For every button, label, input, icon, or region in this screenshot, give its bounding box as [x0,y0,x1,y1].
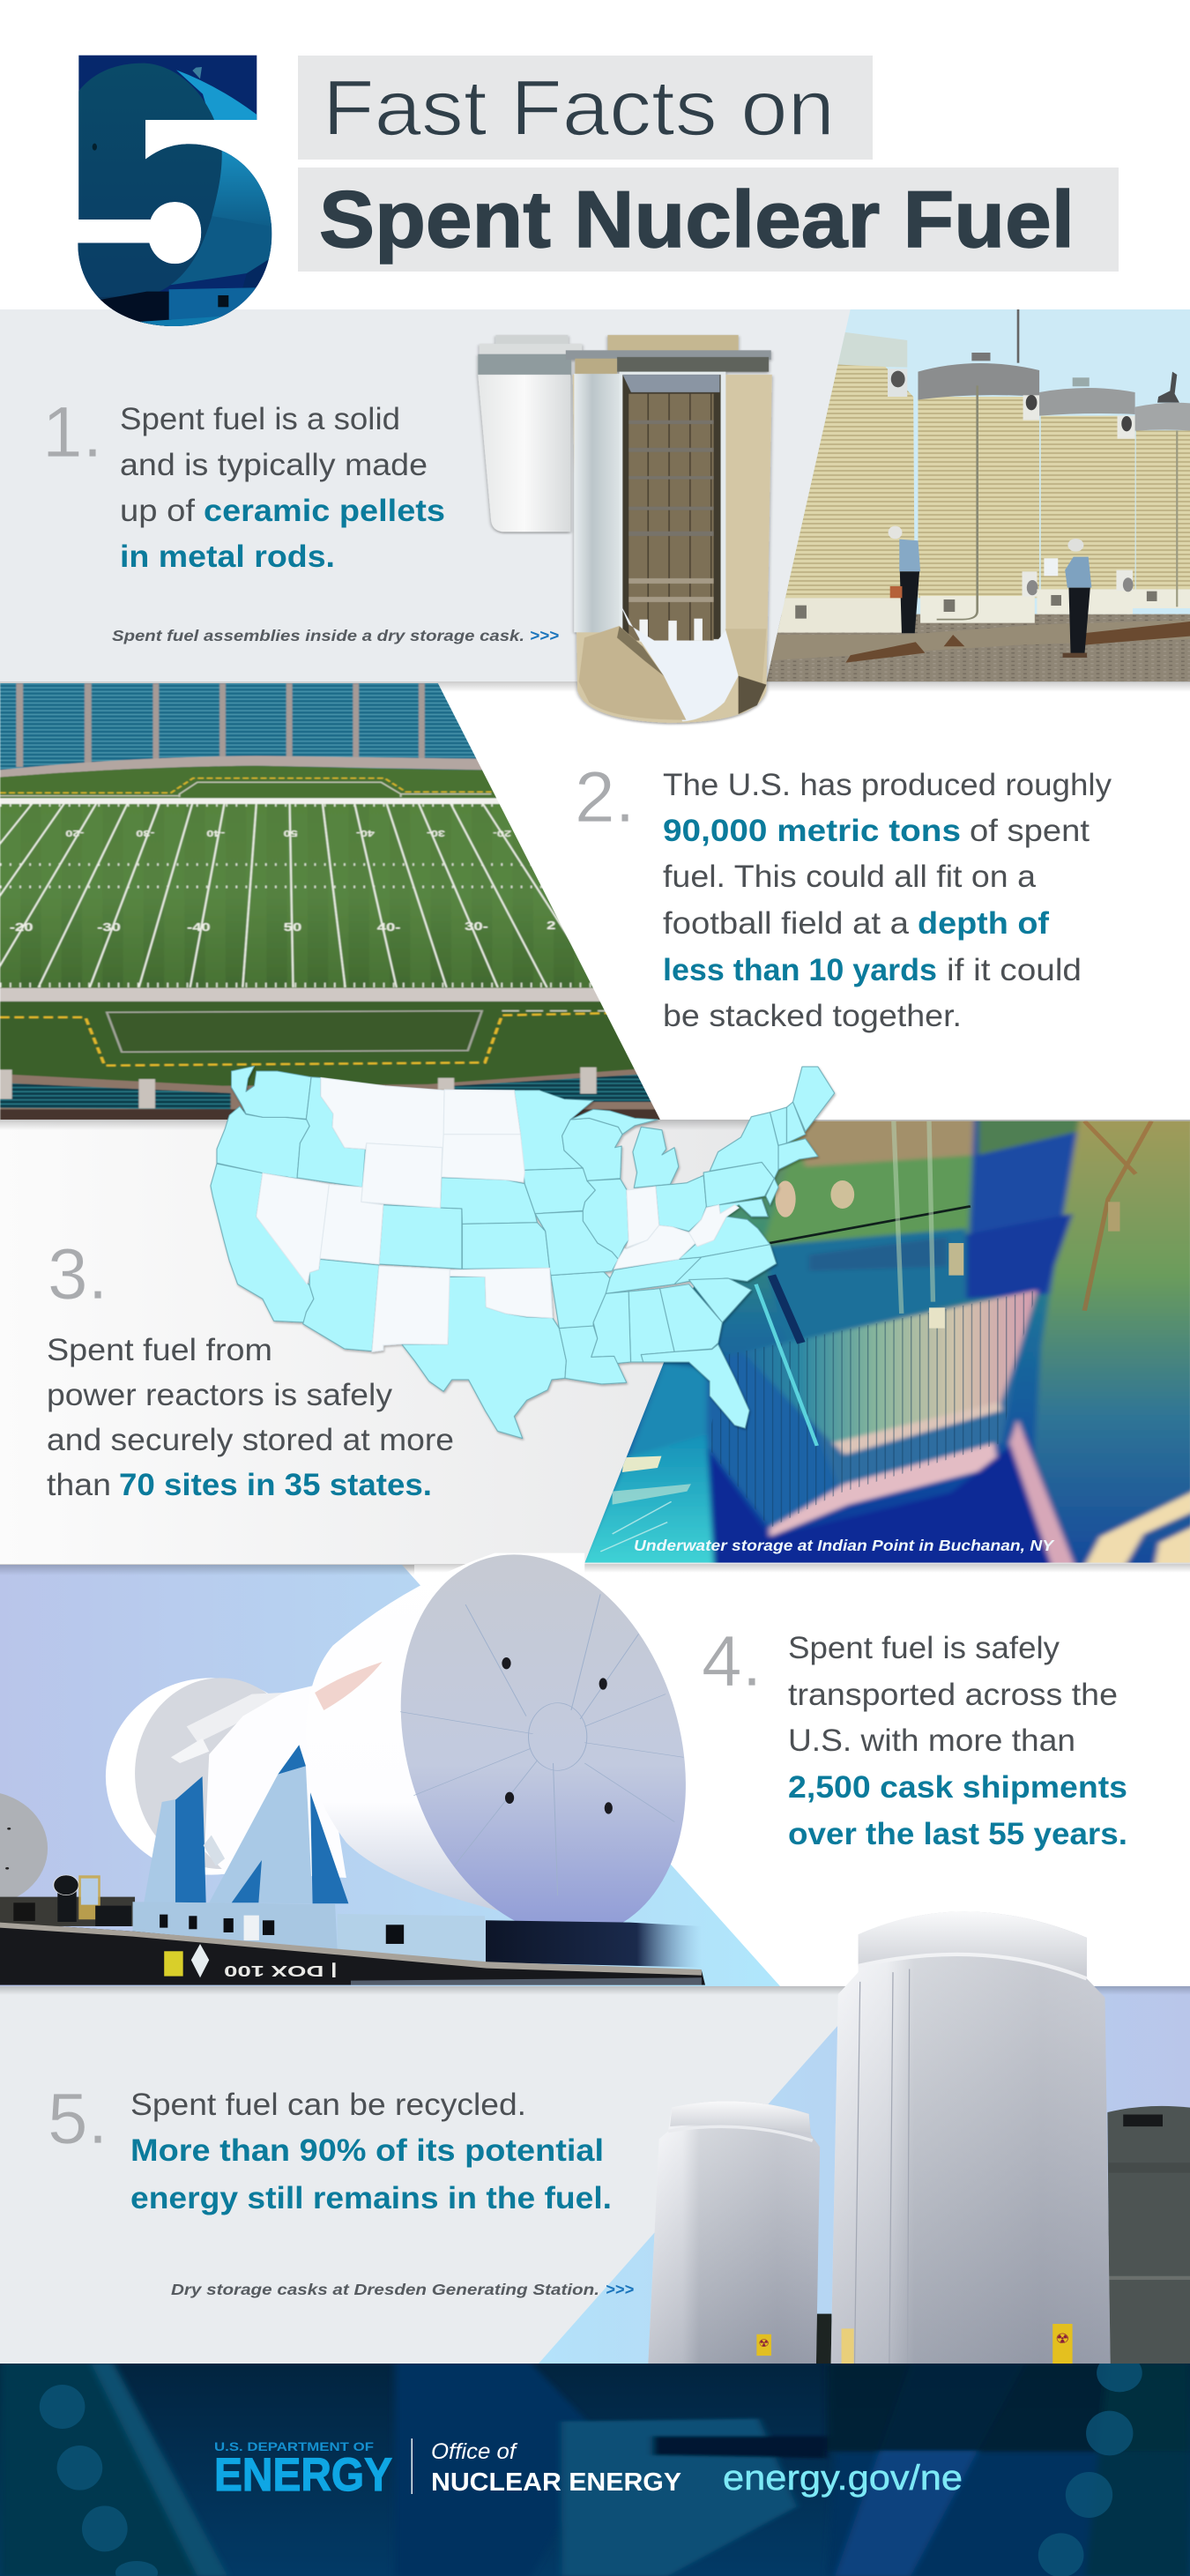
rail car deck: | DOX 100 [224,1962,338,1980]
office name [431,2439,681,2497]
fact 5 text: Spent fuel can be recycled. [130,2088,526,2122]
DOE logo: U.S. DEPARTMENT OF [214,2439,375,2453]
fact 5 text [130,2088,612,2215]
person inspecting left silo [889,526,920,633]
main cask body [573,375,772,723]
shadow under panel 3 on wedge [0,1565,414,1575]
yard numbers [10,829,556,934]
fact 3 text: than [47,1468,111,1502]
panel 5 background [0,1986,1190,2364]
panel 5: recycling [0,1911,1190,2364]
fact 1 text [120,402,445,574]
fact 3 number: 3. [48,1234,108,1314]
footer background image [0,2364,1190,2576]
distant trees [816,2314,831,2364]
yard numbers: 30- [427,829,445,838]
fact 5 text: energy still remains in the fuel. [130,2181,612,2215]
heading: big numeral five [73,51,279,331]
footer [0,2354,1190,2576]
large cask end face [375,1554,712,1937]
fact 2 text: 90,000 metric tons [663,814,961,848]
fact 4 text: U.S. with more than [788,1724,1075,1758]
fact 2 text: depth of [918,906,1049,941]
fact 1 number: 1. [42,392,102,473]
photo: underwater fuel pool [573,1111,1190,1581]
fact 3 text [47,1333,454,1502]
fact 2 text: fuel. This could all fit on a [663,860,1037,894]
fact 3 text: Spent fuel from [47,1333,272,1367]
rear closed cask [478,335,582,532]
fact 2 text: football field at a [663,906,910,941]
caption: Dresden: Dry storage casks at Dresden Generating Station. [171,2281,599,2298]
yard numbers: 40- [356,829,375,838]
caption: cask: Spent fuel assemblies inside a dry storage cask. [112,627,524,644]
yard numbers: -40 [187,922,211,934]
flatbed platform [133,1902,487,1962]
yard numbers: 40- [377,922,400,934]
fact 2 text [663,768,1112,1033]
heading: title [298,56,1119,272]
caption: Dresden: >>> [606,2281,634,2298]
fact 4 text: transported across the [788,1678,1118,1712]
shadow under panel 4 [0,1986,1190,1995]
caption: pool: Underwater storage at Indian Point in Buchanan, NY [634,1537,1054,1554]
fact 4 text [788,1631,1127,1851]
trackside equipment [0,1875,135,1926]
fact 2 text: The U.S. has produced roughly [663,768,1112,802]
large cask body [306,1553,584,1937]
blue support stands [144,1745,348,1903]
shadow under cask [486,1920,702,1968]
large cask: ☢ [1055,2331,1070,2346]
fact 2 text: less than 10 yards [663,953,937,987]
fact 1 text: in metal rods. [120,540,335,574]
illustration: dry storage cask cutaway [478,335,772,723]
panel 3 background [0,1120,1190,1564]
yard numbers: 50 [283,829,298,838]
small cask [648,2101,820,2364]
fact 2 text: of spent [970,814,1090,848]
shadow under panel 2 [0,1120,1190,1130]
connecting cylinder [205,1686,346,1878]
office name: NUCLEAR ENERGY [431,2468,681,2497]
panel 2: football field [0,679,1112,1122]
caption: cask: >>> [530,627,559,644]
fact 1 text: ceramic pellets [204,494,445,528]
small cask: ☢ [758,2337,770,2349]
fact 2 text: be stacked together. [663,999,962,1033]
panel 1 background [0,309,1190,681]
yard numbers: 2 [547,920,556,932]
fact 5 text: More than 90% of its potential [130,2133,604,2168]
fact 1 text: and is typically made [120,448,428,482]
photo: dry storage casks at Dresden [648,1911,1190,2364]
fact 4 text: Spent fuel is safely [788,1631,1060,1665]
fact 2 text: if it could [947,953,1082,987]
person holding clipboard [1044,539,1091,658]
rear cask [106,1678,317,1875]
states without storage sites [257,1077,739,1351]
title line 2: Spent Nuclear Fuel [319,175,1075,264]
yard numbers: -20 [65,829,84,838]
dark cask [1107,2106,1190,2364]
fact 2 number: 2. [575,757,635,838]
fact 3 text: and securely stored at more [47,1423,454,1457]
fact 5 number: 5. [48,2079,108,2159]
photo: transport casks on rail car [0,1553,712,1985]
yard numbers: -30 [136,829,154,838]
states with spent fuel storage sites [211,1066,835,1439]
rail car deck [0,1923,705,1985]
yard numbers: 20- [493,829,511,838]
yard numbers: -20 [10,922,33,934]
photo: dry storage silos [757,309,1190,683]
panel 4 sky wedge [0,1565,780,1986]
shadow under panel 1 [0,681,1190,692]
title line 1: Fast Facts on [323,63,835,152]
office name: Office of [431,2439,518,2464]
map: contiguous United States with storage states highlighted [211,1066,835,1439]
fact 3 text: power reactors is safely [47,1378,393,1412]
large cask [831,1911,1111,2364]
small distant cask [0,1791,48,1906]
yard numbers: 30- [465,921,488,933]
panel 5 sky wedge [539,1986,1190,2364]
fact 1 text: Spent fuel is a solid [120,402,400,436]
panel 4: transport [0,1553,1127,1986]
website: energy.gov/ne [723,2459,963,2498]
photo: football stadium [0,679,670,1122]
shadow under panel 3 [0,1564,1190,1573]
yard numbers: 50 [284,922,302,934]
fact 4 text: over the last 55 years. [788,1817,1127,1851]
fact 1 text: up of [120,494,195,528]
fact 4 text: 2,500 cask shipments [788,1770,1127,1805]
fact 3 text: 70 sites in 35 states. [119,1468,432,1502]
fact 4 number: 4. [702,1621,762,1701]
yard numbers: -30 [97,922,121,934]
DOE logo: ENERGY [214,2449,392,2501]
yard numbers: -40 [206,829,225,838]
panel 1: solid fuel [0,51,1190,692]
fuel assemblies [628,394,714,641]
panel 3: storage sites [0,1066,1190,1581]
broken outer concrete [620,602,739,721]
